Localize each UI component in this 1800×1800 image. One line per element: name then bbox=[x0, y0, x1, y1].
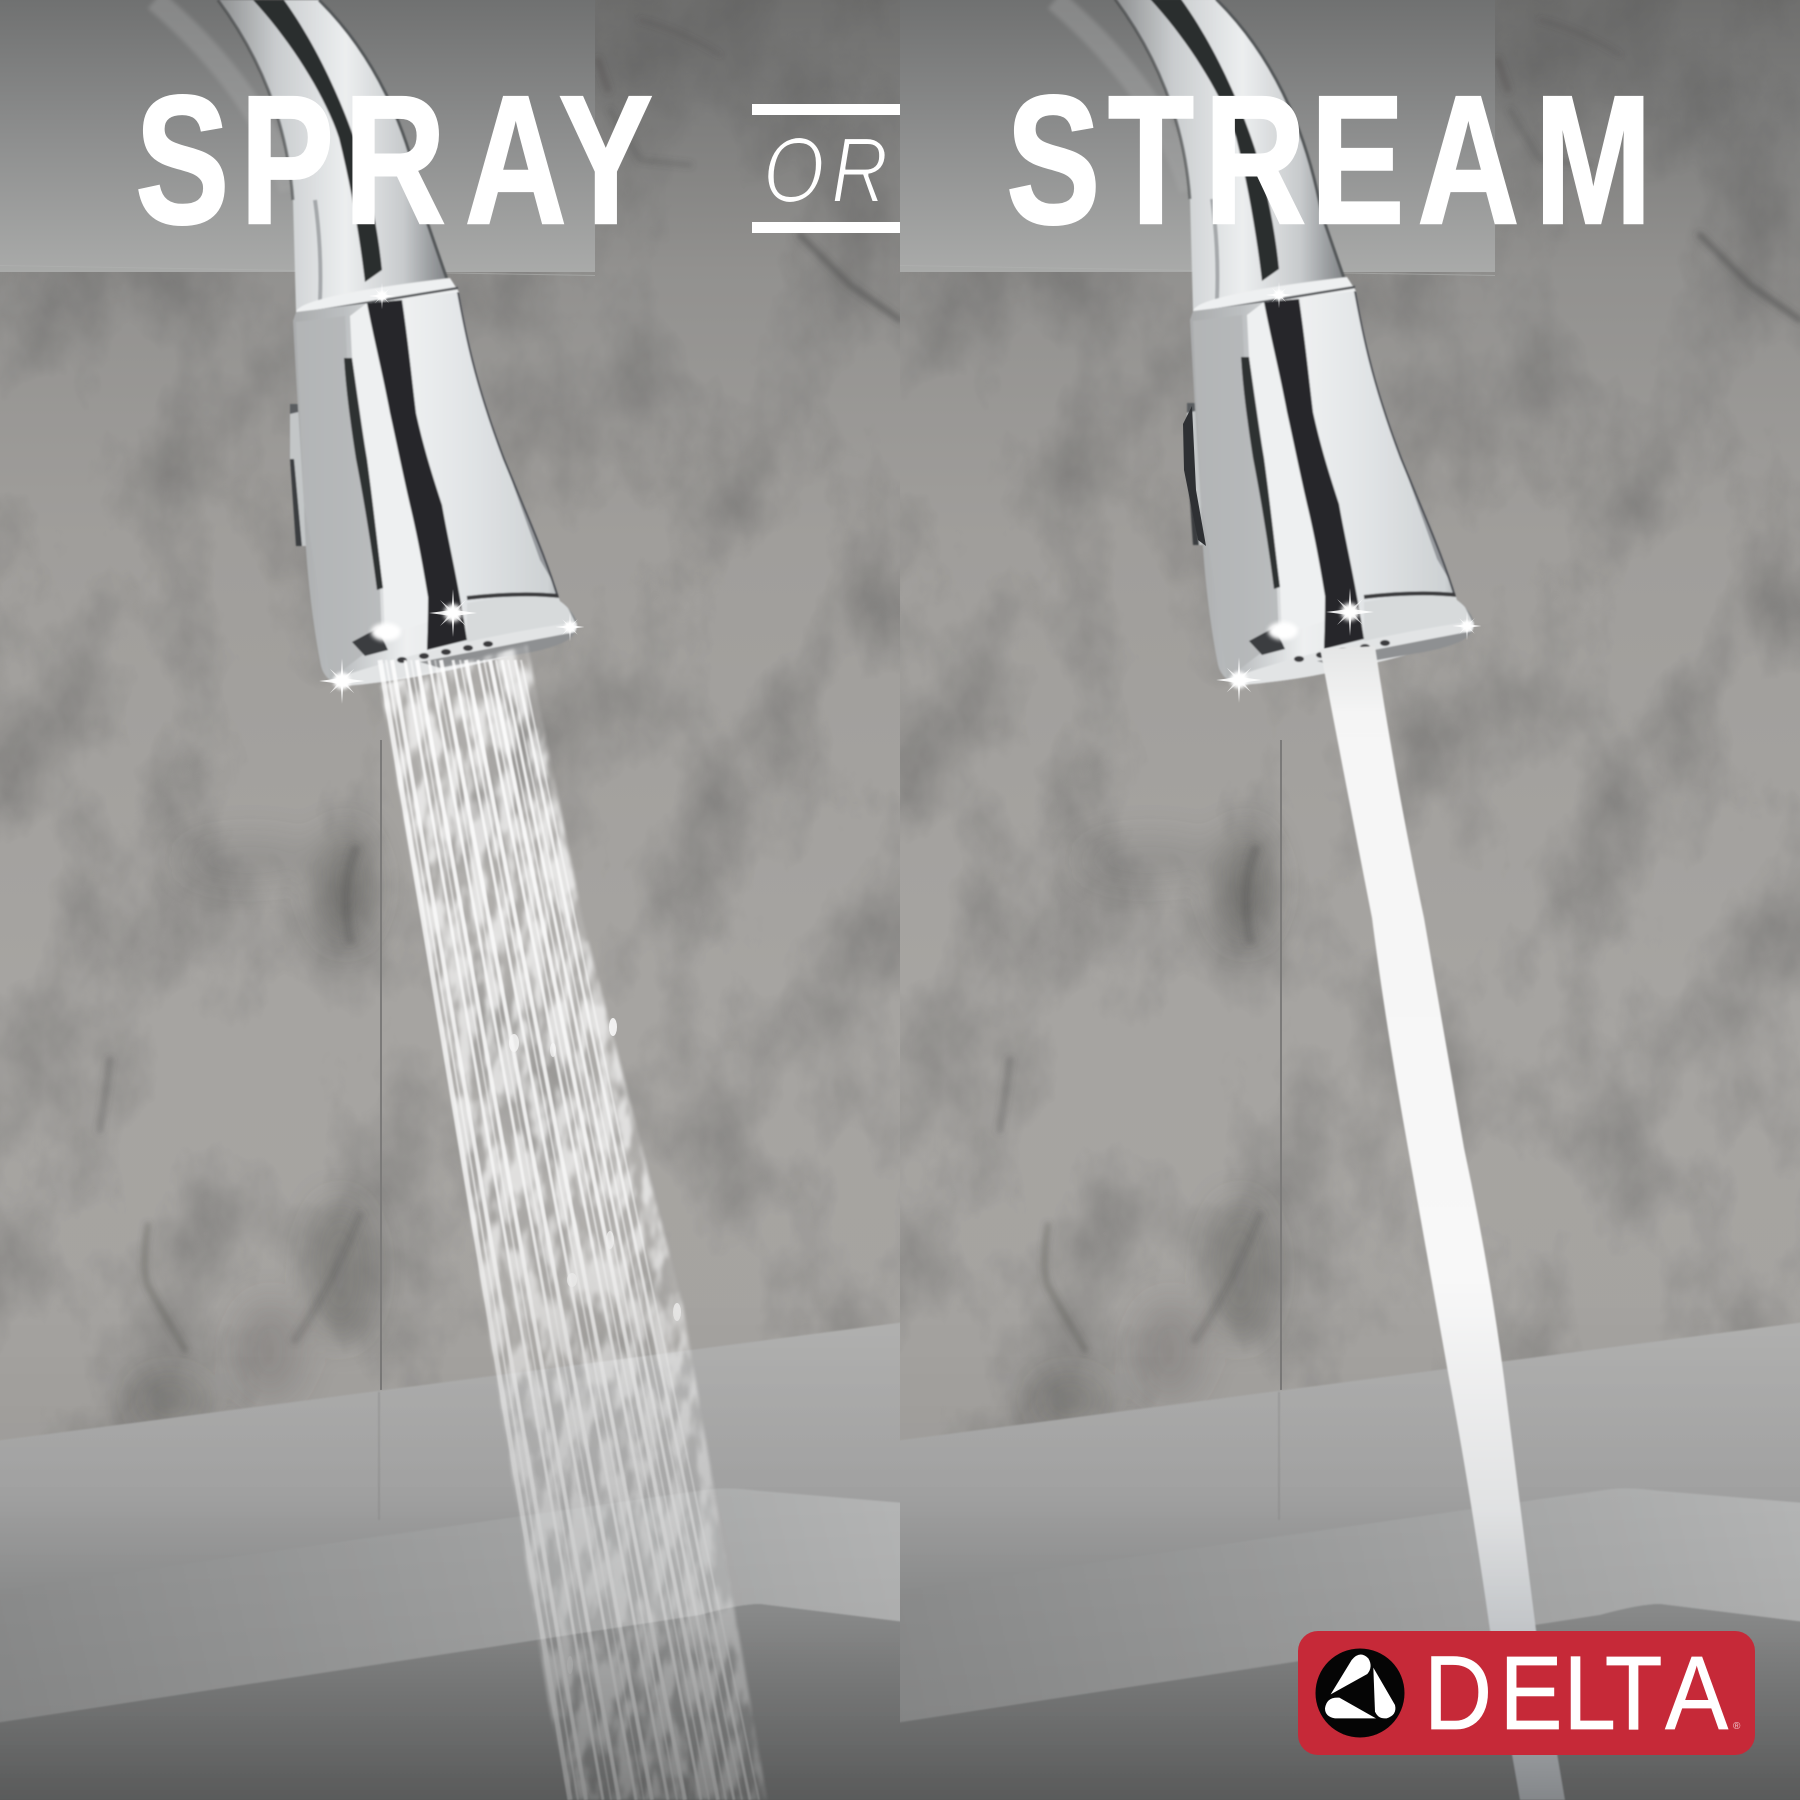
title: SPRAY: SPRAY bbox=[135, 57, 653, 262]
title: STREAM: STREAM bbox=[1006, 57, 1652, 262]
marble wall, counter and sink backdrop bbox=[895, 0, 1800, 1800]
registered mark: ® bbox=[1733, 1721, 1741, 1732]
faucet spray head bbox=[218, 0, 584, 704]
top rule bbox=[752, 104, 900, 115]
marble wall, counter and sink backdrop bbox=[0, 0, 905, 1800]
bottom rule bbox=[752, 222, 900, 233]
divider: OR bbox=[752, 104, 900, 233]
panel: spray bbox=[0, 0, 905, 1800]
panel: stream bbox=[895, 0, 1800, 1800]
stream of water bbox=[1320, 646, 1565, 1800]
icon: Delta triangle mark bbox=[1316, 1648, 1404, 1738]
word OR: OR bbox=[763, 119, 888, 222]
spray water jets bbox=[378, 644, 766, 1800]
red badge bbox=[1298, 1631, 1755, 1755]
wordmark: DELTA bbox=[1424, 1635, 1728, 1752]
logo: Delta badge bbox=[1298, 1631, 1755, 1755]
faucet stream head bbox=[1115, 0, 1481, 703]
